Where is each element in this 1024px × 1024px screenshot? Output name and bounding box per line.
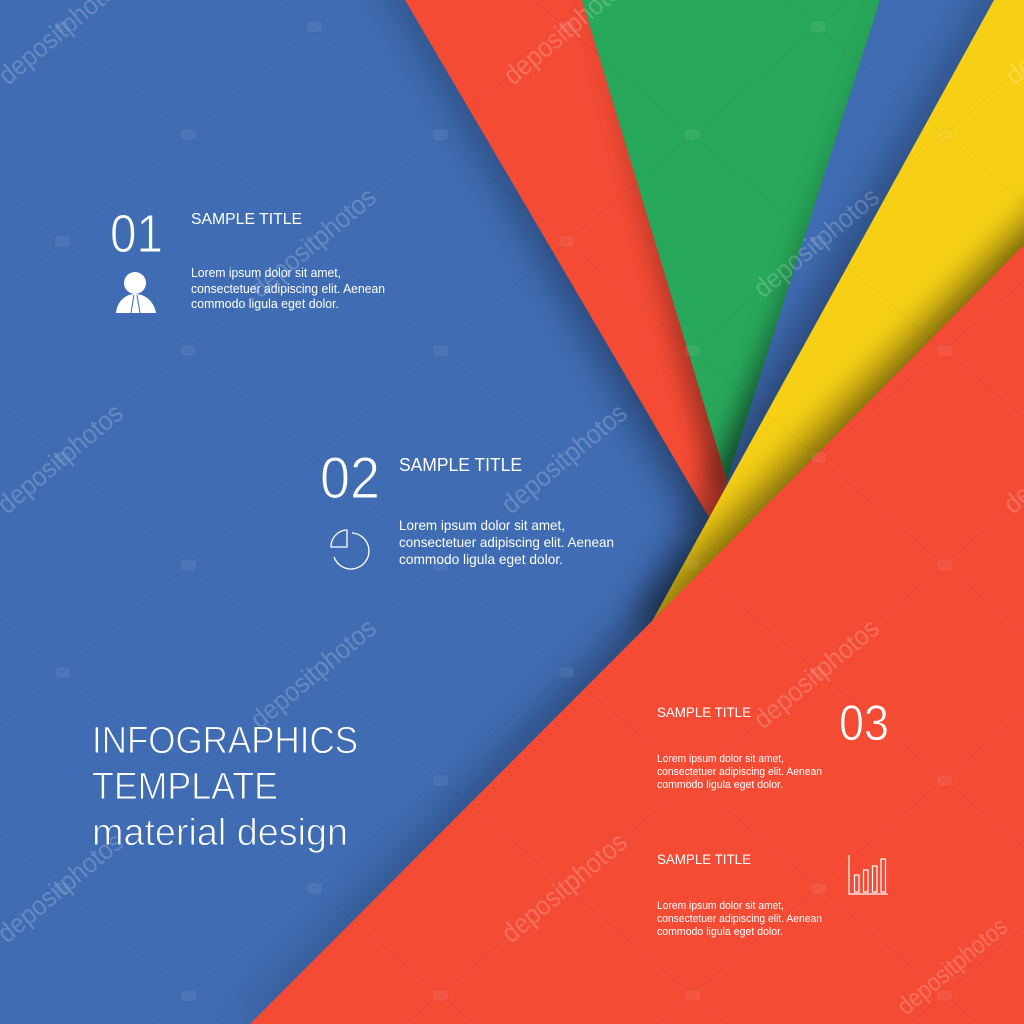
shadow: red sheet on blue xyxy=(352,0,730,520)
section 03 body text: Lorem ipsum dolor sit amet, xyxy=(657,753,784,765)
shadow: green sheet on red xyxy=(590,26,727,498)
section 02 body text xyxy=(399,517,614,567)
section 03 body text xyxy=(657,753,822,791)
shadow: yellow sheet on lower layers xyxy=(635,0,1024,640)
panel: green wedge xyxy=(582,0,880,540)
section 02 body text: consectetuer adipiscing elit. Aenean xyxy=(399,534,614,550)
heading: infographics template: TEMPLATE xyxy=(92,766,278,808)
section 01 body text: consectetuer adipiscing elit. Aenean xyxy=(191,282,385,296)
number 01: 01 xyxy=(110,204,163,264)
panel: blue wedge xyxy=(720,0,994,502)
section 04 body text: commodo ligula eget dolor. xyxy=(657,926,783,938)
watermark: repeated stock text: depositphotos xyxy=(748,182,885,304)
section 04 body text: Lorem ipsum dolor sit amet, xyxy=(657,900,784,912)
watermark: repeated stock text: depositphotos xyxy=(245,182,382,304)
icon: bar chart outline xyxy=(849,855,888,894)
icon: person with tie xyxy=(116,272,156,313)
number 02: 02 xyxy=(320,446,380,511)
section 02 xyxy=(320,446,614,569)
section 03 title: SAMPLE TITLE xyxy=(657,704,751,720)
panel: yellow wedge xyxy=(650,0,1024,630)
section 02 title: SAMPLE TITLE xyxy=(399,455,522,475)
section 04 body text xyxy=(657,900,822,938)
section 01 title: SAMPLE TITLE xyxy=(191,211,302,228)
watermark: repeated stock text: depositphotos xyxy=(496,398,633,520)
section 01 body text: commodo ligula eget dolor. xyxy=(191,297,339,311)
watermark: repeated stock text: depositphotos xyxy=(245,613,382,735)
heading: infographics template: material design xyxy=(92,812,348,854)
section 02 body text: commodo ligula eget dolor. xyxy=(399,551,563,567)
watermark: repeated stock text: depositphotos xyxy=(496,827,633,949)
section 04 body text: consectetuer adipiscing elit. Aenean xyxy=(657,913,822,925)
shadow: big red sheet on yellow and blue xyxy=(226,150,1024,1024)
number 03: 03 xyxy=(839,695,889,751)
section 01 body text xyxy=(191,266,385,311)
panel: red wedge xyxy=(405,0,745,540)
section 03 body text: consectetuer adipiscing elit. Aenean xyxy=(657,766,822,778)
section 03 body text: commodo ligula eget dolor. xyxy=(657,779,783,791)
shadow: blue sheet on green xyxy=(716,62,860,480)
heading: infographics template xyxy=(92,720,358,854)
panel: big red sheet xyxy=(250,245,1024,1024)
section 01 xyxy=(110,204,385,313)
watermark: repeated stock text: depositphotos xyxy=(748,613,885,735)
heading: infographics template: INFOGRAPHICS xyxy=(92,720,358,762)
section 02 body text: Lorem ipsum dolor sit amet, xyxy=(399,517,565,533)
icon: pie chart outline xyxy=(331,530,369,569)
section 04 title: SAMPLE TITLE xyxy=(657,851,751,867)
section 01 body text: Lorem ipsum dolor sit amet, xyxy=(191,266,341,280)
section 03 xyxy=(657,695,889,791)
section 04 xyxy=(657,851,888,938)
